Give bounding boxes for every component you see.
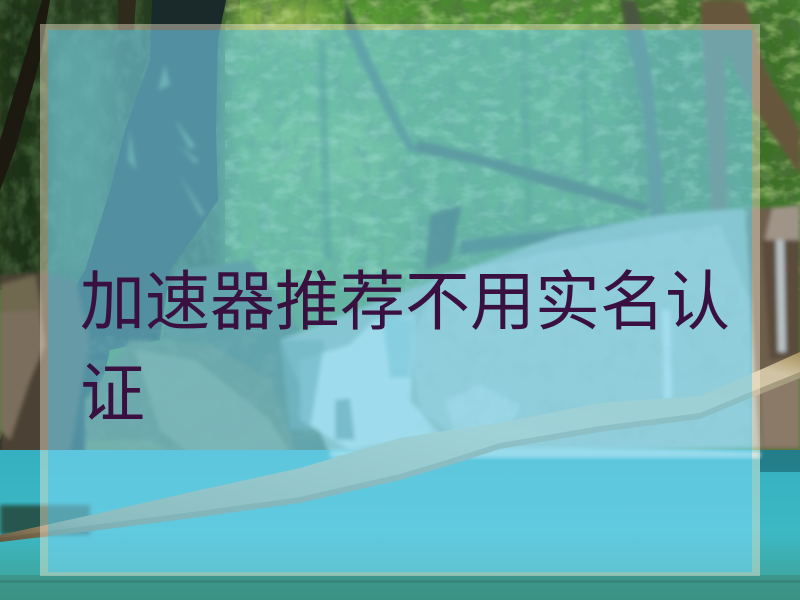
fallen log <box>0 352 800 542</box>
waterfall and pale limestone terraces <box>280 208 760 455</box>
turquoise water <box>0 447 800 600</box>
rocks <box>0 205 800 510</box>
title: 加速器推荐不用实名认证 <box>80 265 730 430</box>
